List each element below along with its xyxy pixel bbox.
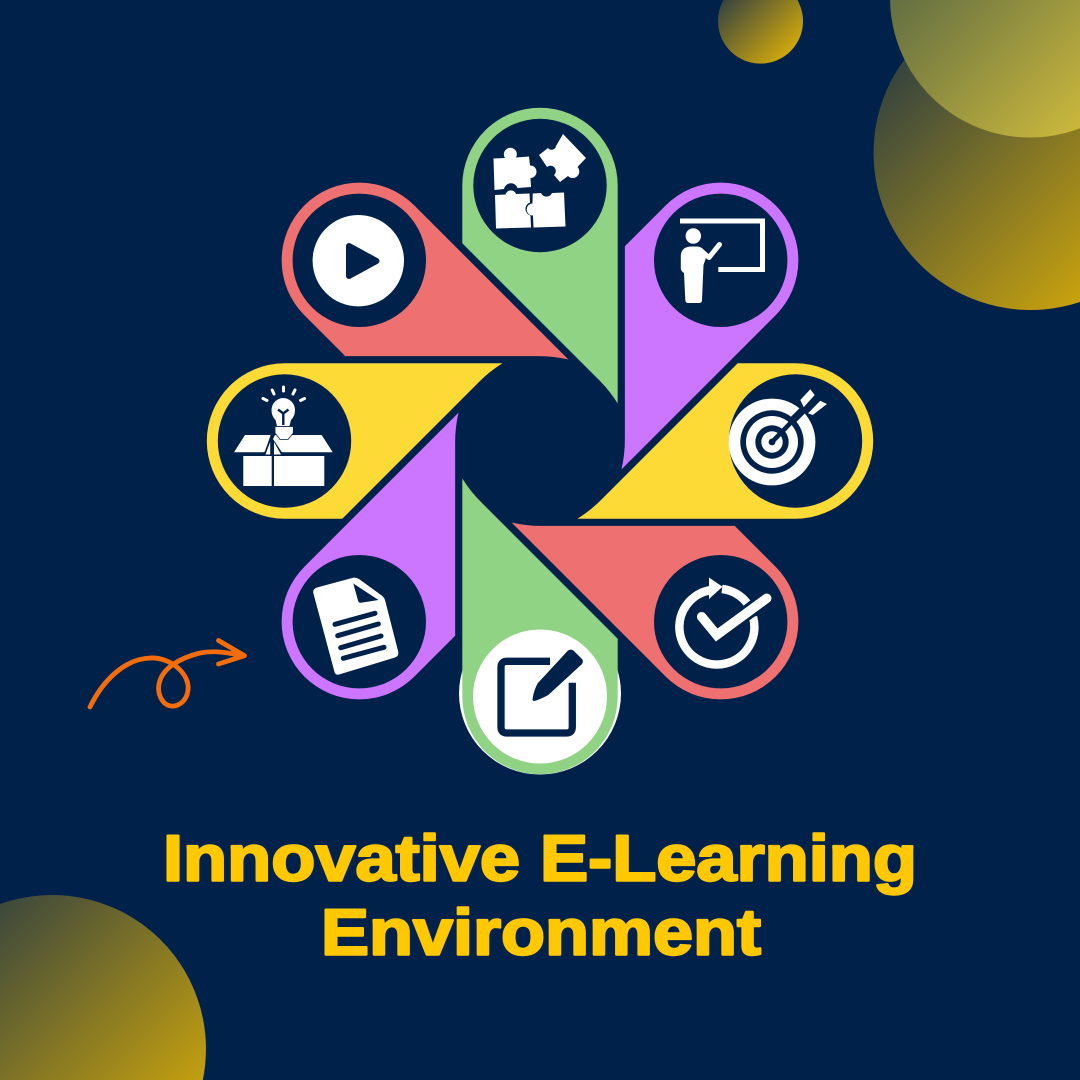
title — [163, 822, 917, 968]
decorative circle: bottom left — [0, 895, 206, 1080]
title line 1: Innovative E-Learning — [163, 822, 917, 894]
icon: play button — [313, 215, 404, 306]
icon: teacher at board — [680, 221, 762, 303]
petal: bottom green, edit — [459, 478, 621, 774]
arrow: curly orange — [90, 640, 244, 707]
petal: upper right purple, teacher — [512, 150, 831, 469]
title line 2: Environment — [321, 896, 761, 968]
decorative circle: light top right — [890, 0, 1080, 138]
petal: upper left red, play — [249, 150, 568, 469]
petal: lower left purple, document — [249, 413, 568, 732]
icon: light bulb in box — [234, 387, 333, 486]
decorative circle: large right — [874, 0, 1080, 310]
icon: puzzle pieces — [494, 134, 586, 228]
petal: left yellow, idea box — [207, 363, 502, 519]
petal: lower right red, check — [512, 413, 831, 732]
icon: target with arrow — [729, 389, 827, 485]
icon: edit pencil — [501, 650, 583, 733]
petal: right yellow, target — [578, 363, 873, 519]
petal: top green, puzzle — [462, 108, 618, 404]
icon: document — [313, 578, 398, 675]
decorative circle: small top — [718, 0, 803, 64]
icon: cycle with check mark — [679, 578, 767, 665]
